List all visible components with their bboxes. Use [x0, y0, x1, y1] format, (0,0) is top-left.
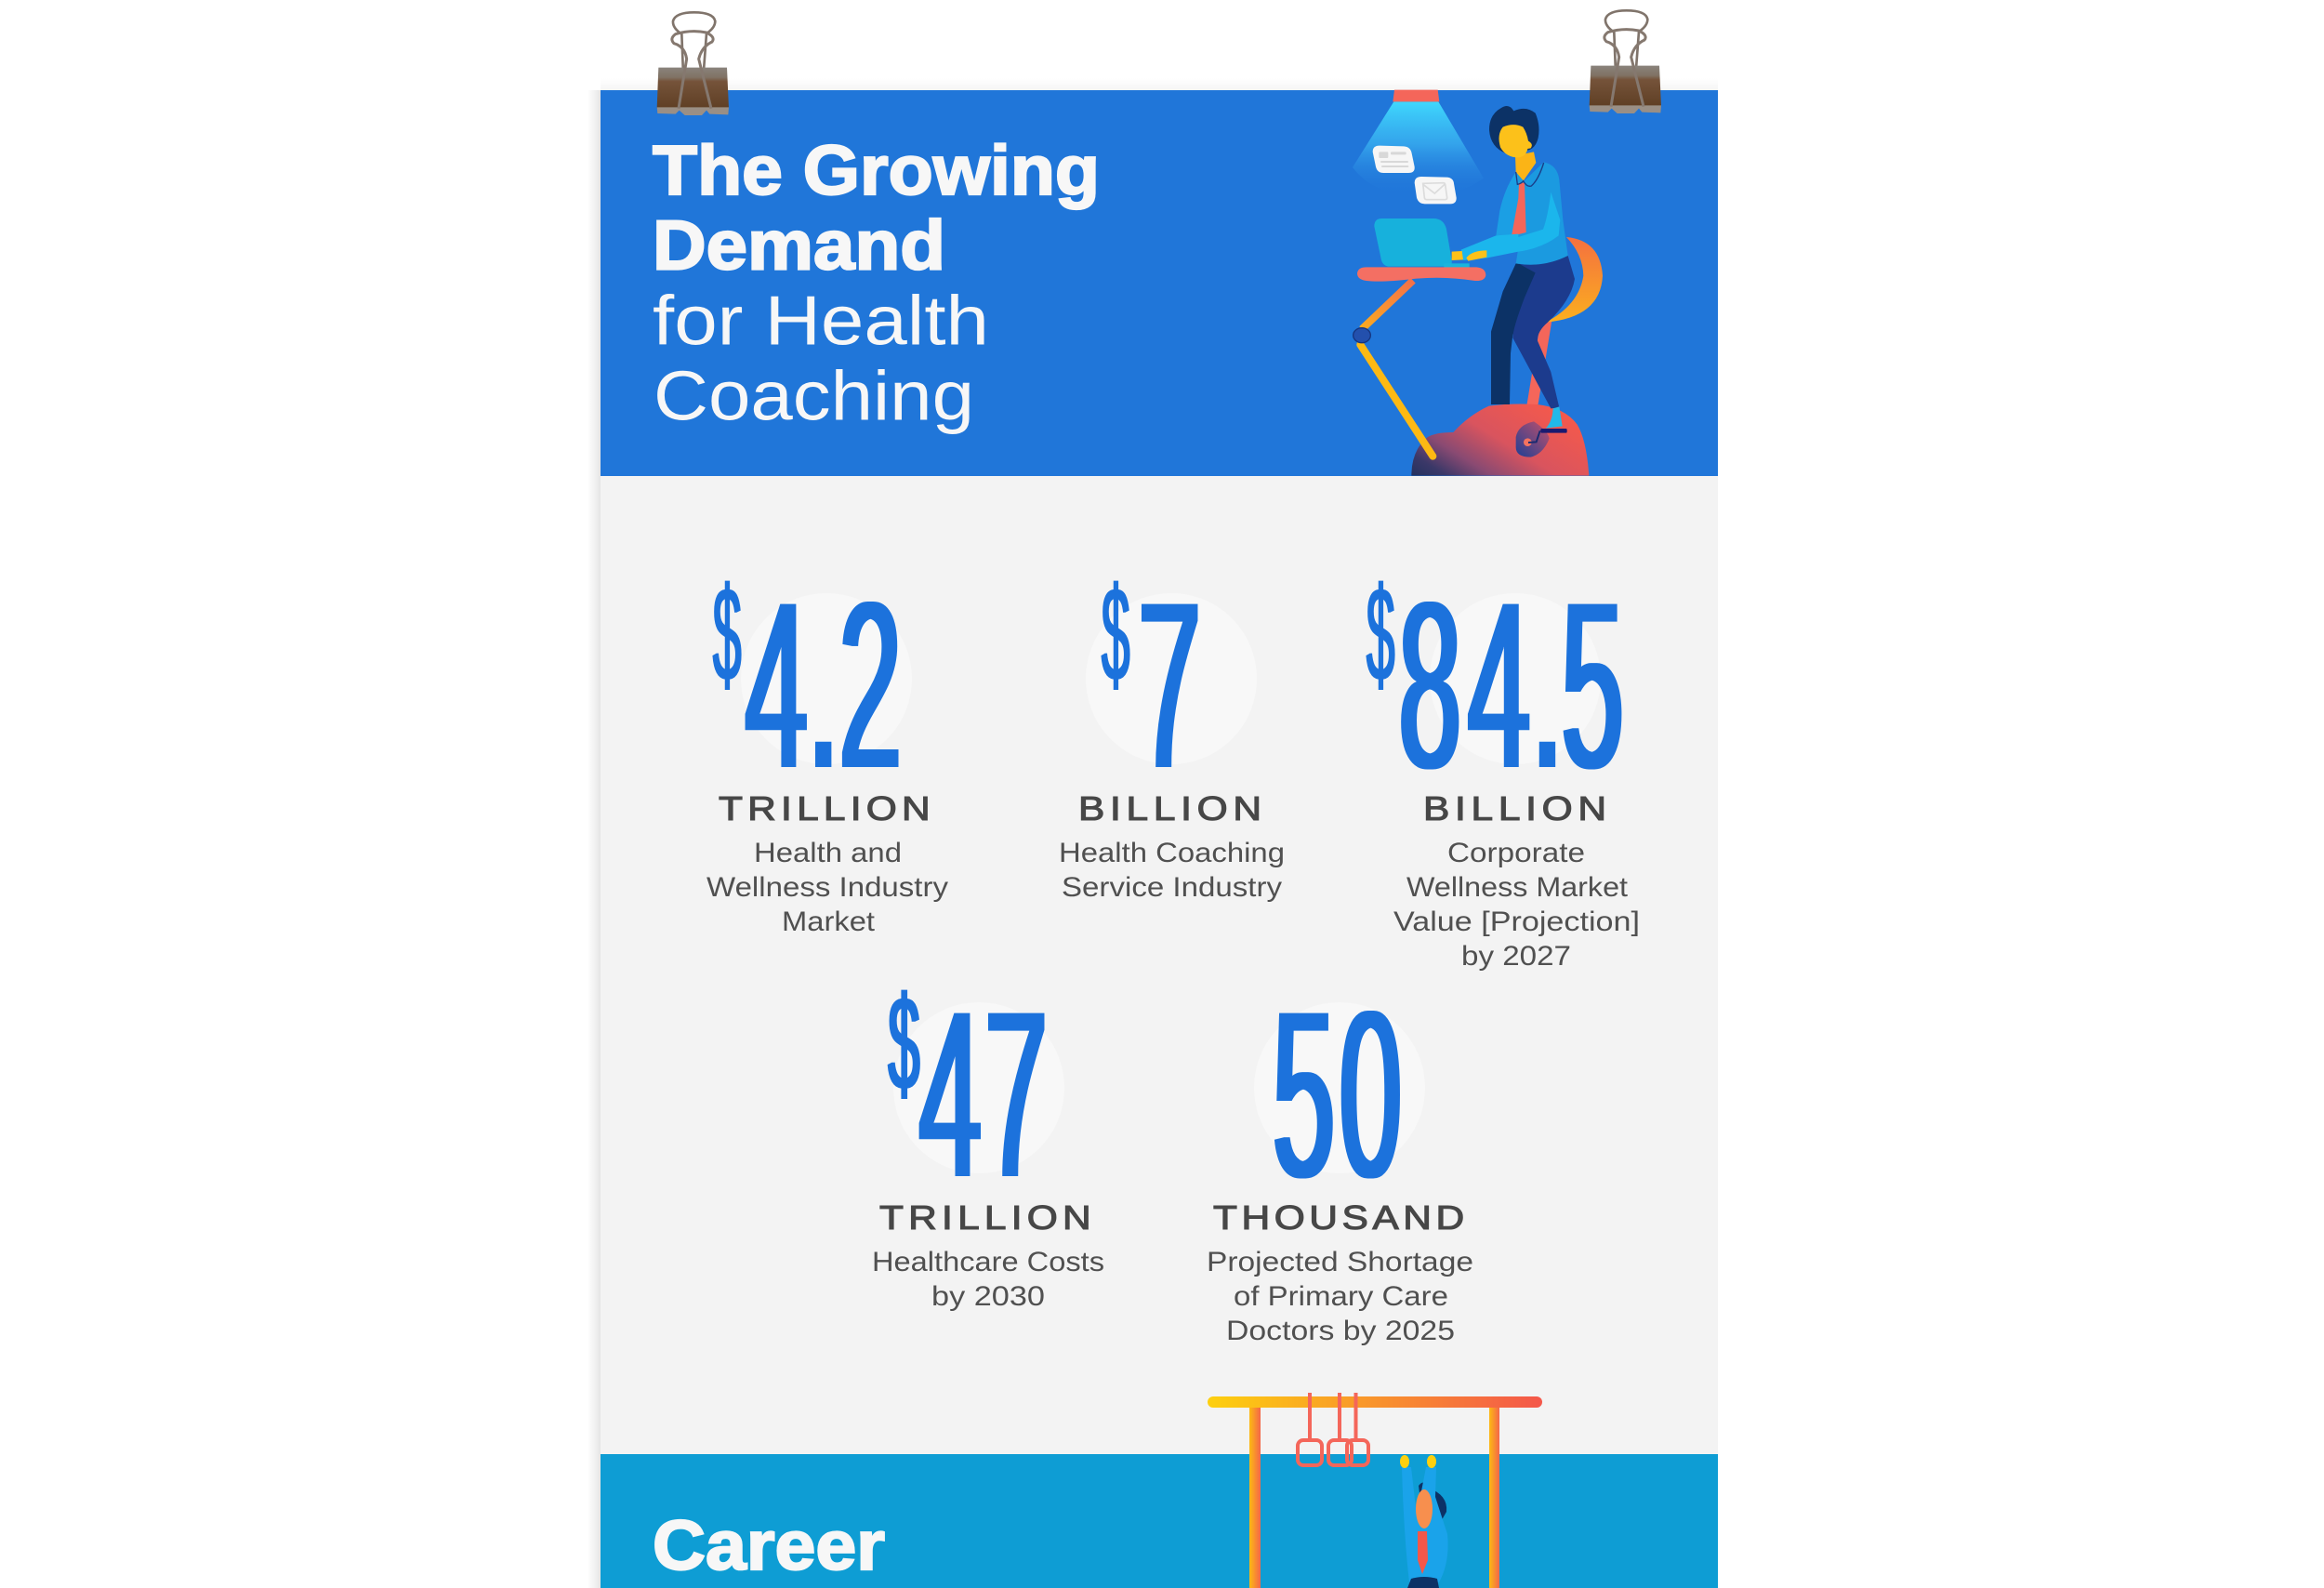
laptop [1374, 218, 1470, 268]
collar [1516, 163, 1544, 186]
stat: 7 billion [1059, 554, 1285, 903]
shoe [1546, 406, 1563, 429]
stat: 4.2 trillion: Wellness Industry [706, 872, 948, 903]
icon: person working at exercise bike desk [1353, 90, 1603, 476]
hands [1400, 1455, 1436, 1468]
front leg [1512, 256, 1575, 408]
stat: 84.5 billion: Value [Projection] [1393, 906, 1640, 937]
stat: 84.5 billion: by 2027 [1461, 941, 1571, 972]
panel: header [601, 90, 1718, 476]
stat: 47 trillion: Healthcare Costs [872, 1247, 1104, 1277]
stat: 4.2 trillion: TRILLION [719, 790, 931, 827]
stat: 47 trillion: $ [889, 967, 919, 1118]
mail card [1415, 177, 1457, 204]
stat: 50 thousand: Doctors by 2025 [1226, 1316, 1455, 1346]
hair [1489, 106, 1539, 153]
stat: 4.2 trillion: $ [713, 560, 741, 710]
back leg [1491, 263, 1538, 404]
stat: 84.5 billion: 84.5 [1399, 554, 1623, 818]
desk top [1357, 267, 1486, 282]
hair [1419, 1482, 1446, 1525]
stat: 50 thousand: Projected Shortage [1207, 1247, 1473, 1277]
stat: 7 billion: BILLION [1078, 790, 1261, 827]
pedal [1516, 421, 1567, 457]
stat: 7 billion: Health Coaching [1059, 838, 1285, 868]
icon: gymnastic rings frame [1208, 1393, 1542, 1588]
neck [1515, 152, 1536, 181]
icon: binder clip left [657, 12, 729, 115]
panel: career [601, 1454, 1718, 1588]
forearm [1461, 192, 1560, 260]
stat: 84.5 billion: Wellness Market [1406, 872, 1628, 903]
desk upper arm [1362, 281, 1413, 329]
title: The Growing [653, 131, 1100, 209]
hands [1452, 250, 1486, 261]
title: Demand [653, 206, 945, 285]
shirt and arms [1402, 1467, 1448, 1582]
stat: 4.2 trillion: Market [782, 906, 875, 937]
stat: 7 billion: $ [1102, 560, 1129, 710]
title [653, 131, 1100, 435]
ring left [1298, 1393, 1322, 1465]
stat: 4.2 trillion [706, 554, 948, 937]
stat: 84.5 billion [1367, 554, 1640, 972]
lamp [1353, 90, 1484, 197]
stat: 7 billion: 7 [1139, 554, 1200, 818]
seat post [1526, 321, 1552, 407]
title: Coaching [654, 357, 974, 435]
ring right [1328, 1393, 1368, 1465]
tie [1418, 1531, 1428, 1574]
stat: 50 thousand [1207, 963, 1473, 1346]
stat: 47 trillion: 47 [919, 963, 1048, 1227]
icon: binder clip right [1590, 10, 1661, 113]
stat: 50 thousand: THOUSAND [1213, 1199, 1464, 1237]
pants [1407, 1577, 1439, 1588]
face [1499, 125, 1532, 157]
icon: person hanging from rings [1400, 1455, 1448, 1588]
shirt [1509, 162, 1568, 265]
bike base [1411, 404, 1589, 476]
stat: 84.5 billion: $ [1367, 560, 1394, 710]
stat: 47 trillion [872, 963, 1104, 1312]
poster shadow [588, 78, 1718, 1588]
stat: 47 trillion: by 2030 [931, 1281, 1045, 1312]
face [1416, 1489, 1433, 1528]
desk lower arm and joint [1353, 328, 1433, 457]
heading: career: Career [653, 1506, 885, 1584]
stat: 4.2 trillion: 4.2 [746, 554, 902, 818]
stat: 84.5 billion: Corporate [1447, 838, 1585, 868]
title: for Health [653, 281, 989, 359]
seat [1546, 237, 1603, 323]
stat: 50 thousand: 50 [1273, 963, 1402, 1227]
stat: 7 billion: Service Industry [1062, 872, 1282, 903]
panel: statistics background [601, 476, 1718, 1454]
tie [1512, 183, 1526, 236]
stat: 50 thousand: of Primary Care [1234, 1281, 1448, 1312]
document card [1373, 146, 1415, 173]
stat: 84.5 billion: BILLION [1423, 790, 1606, 827]
stat: 47 trillion: TRILLION [879, 1199, 1091, 1237]
left sleeve [1496, 172, 1522, 236]
stat: 4.2 trillion: Health and [754, 838, 902, 868]
